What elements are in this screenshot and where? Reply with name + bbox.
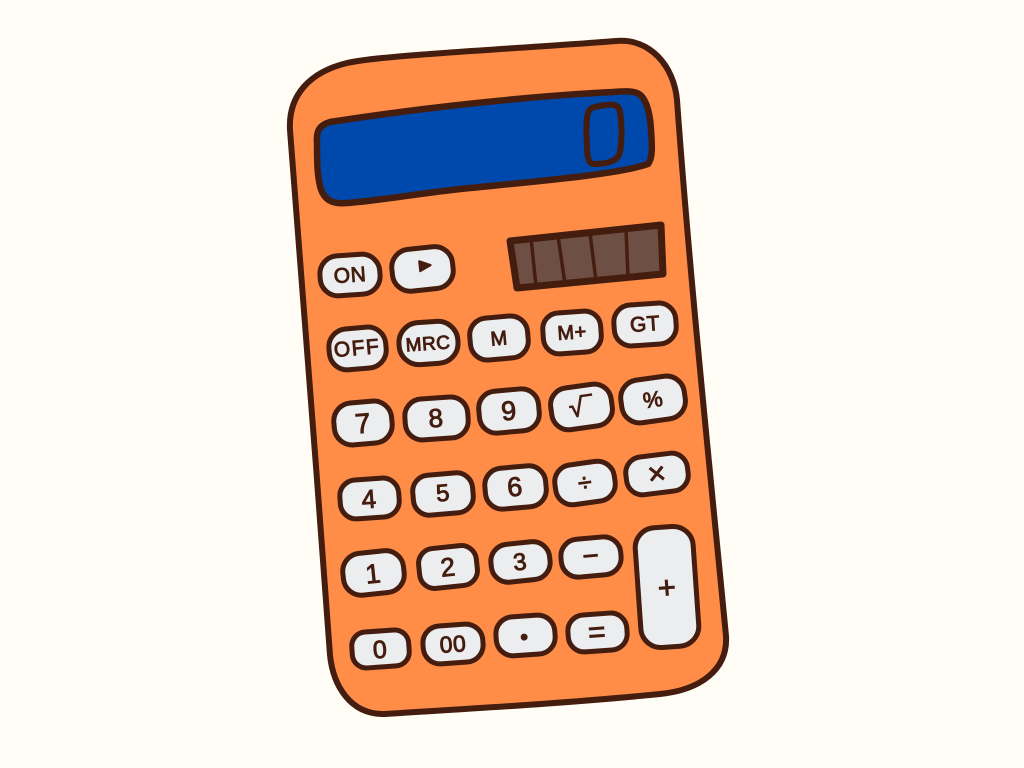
key: 00: 00 [439,630,467,658]
key: 6 [483,464,548,511]
key: 9: 9 [500,395,518,427]
key: equals: = [587,615,607,650]
solar panel [510,225,663,288]
key: 8: 8 [427,403,445,433]
key: square root: √‾ [567,390,596,424]
key: 5 [411,471,475,517]
key: 0: 0 [372,636,388,664]
key: M+ [542,310,602,355]
key: GT [613,302,677,347]
key: 1 [341,549,406,597]
key: plus [634,525,700,649]
display digit zero [586,105,622,164]
key: M+: M+ [557,321,587,345]
key: 3: 3 [512,548,528,577]
display screen [317,91,652,203]
key: 7: 7 [354,407,372,440]
key: square root [548,382,615,432]
key: 00 [422,623,484,665]
key: decimal point [495,614,556,657]
key: minus: − [581,539,601,572]
key: ON: ON [333,263,367,288]
key: 5: 5 [435,479,451,508]
key: 3 [489,540,552,584]
key: GT: GT [629,312,661,337]
key: OFF [327,326,388,371]
key: M: M [490,327,509,351]
key: 1: 1 [364,558,382,590]
key: MRC [398,320,459,366]
key: 9 [477,387,541,435]
key: 8 [404,396,469,441]
key: multiply: × [646,455,668,492]
key: MRC: MRC [405,332,451,357]
key: minus [559,535,623,579]
key: multiply [624,451,690,497]
key: divide [553,459,617,507]
key: 4 [339,477,400,520]
key: play [390,245,455,293]
key: OFF: OFF [333,335,381,362]
key: percent: % [641,386,665,413]
key: 7 [332,400,394,446]
key: equals [567,612,628,653]
key: 6: 6 [506,471,524,503]
key: 2 [417,544,479,590]
key: plus: + [657,569,678,606]
key: 0 [351,629,410,669]
key: percent [618,374,688,425]
key: divide: ÷ [576,468,594,498]
key: 4: 4 [361,484,378,514]
key: M [468,315,530,361]
key: 2: 2 [439,551,457,583]
key: ON [319,253,381,297]
calculator body [290,41,726,714]
